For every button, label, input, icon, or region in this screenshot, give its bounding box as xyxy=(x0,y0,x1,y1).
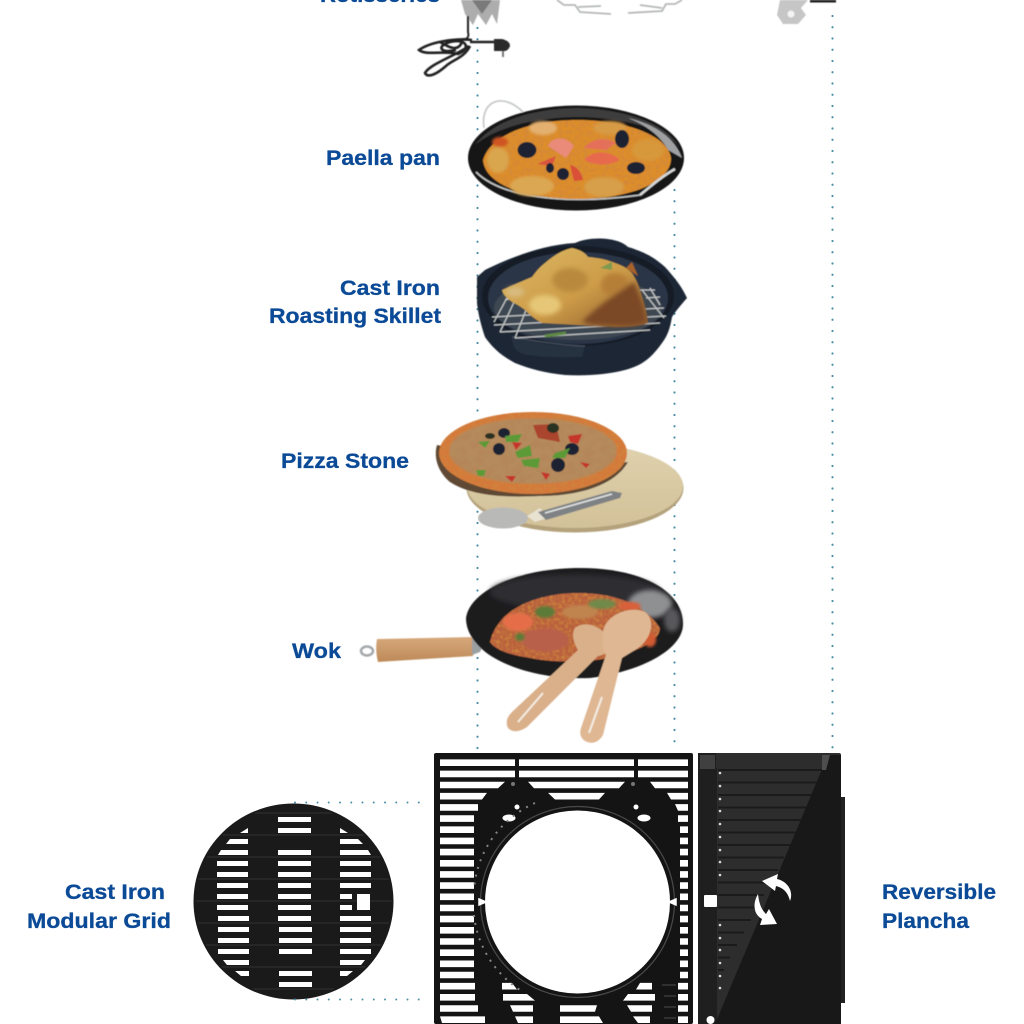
label: Cast Iron Roasting Skillet: Cast Iron xyxy=(340,277,440,300)
reversible plancha xyxy=(698,753,845,1024)
paella pan xyxy=(468,101,684,210)
label: Reversible Plancha: Plancha xyxy=(882,910,969,933)
label: Cast Iron Roasting Skillet: Roasting Skillet xyxy=(269,305,441,328)
label: Cast Iron Modular Grid: Modular Grid xyxy=(27,910,171,933)
square cast iron grate with round opening xyxy=(434,753,693,1024)
dotted leader lines to the grate xyxy=(295,802,422,1000)
rotisserie motor and power cord xyxy=(419,0,510,75)
pizza stone with cutter xyxy=(436,412,684,532)
rotisserie spit basket xyxy=(557,0,682,14)
label: Reversible Plancha xyxy=(882,881,996,933)
rotisserie bracket xyxy=(777,0,836,24)
label: Reversible Plancha: Reversible xyxy=(882,881,996,904)
central round opening xyxy=(476,802,680,1002)
icon: flip arrows xyxy=(755,874,791,925)
cast iron roasting skillet xyxy=(477,238,687,375)
label: Wok: Wok xyxy=(292,640,341,663)
dotted guide lines xyxy=(478,16,832,750)
wok with wooden spoons xyxy=(361,568,683,743)
label: Pizza Stone: Pizza Stone xyxy=(281,450,409,473)
label: Cast Iron Modular Grid xyxy=(27,881,171,933)
label: Paella pan: Paella pan xyxy=(326,147,440,170)
label: Cast Iron Modular Grid: Cast Iron xyxy=(65,881,165,904)
label: Cast Iron Roasting Skillet xyxy=(269,277,441,328)
cast iron modular round grid xyxy=(190,804,398,1000)
